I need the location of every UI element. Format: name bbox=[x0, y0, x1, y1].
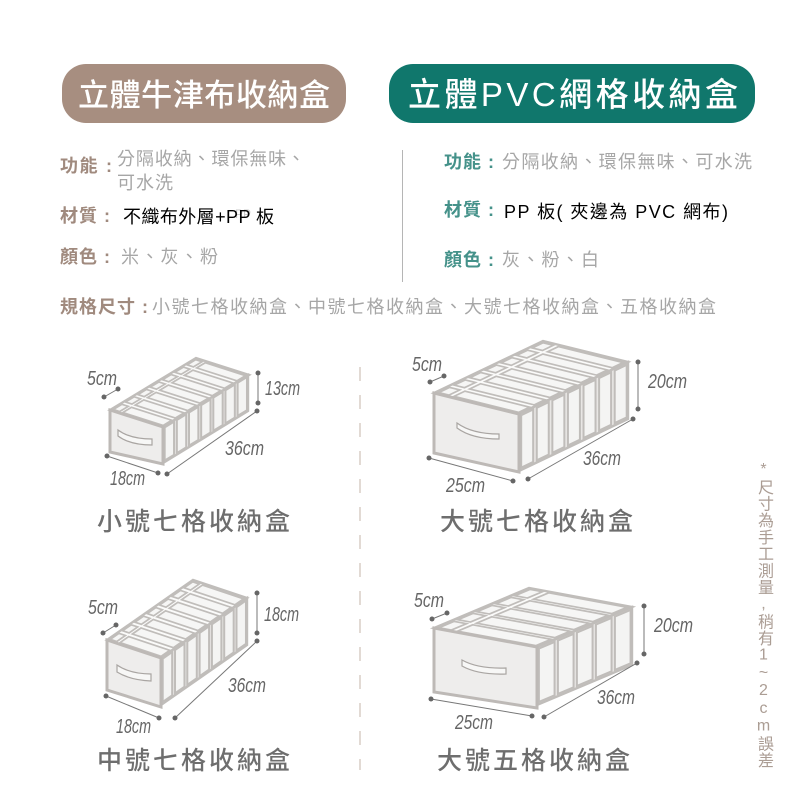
diagram: large 5-grid box bbox=[414, 588, 693, 775]
function row: 功能 : bbox=[60, 156, 112, 176]
dimension labels: 18cm bbox=[110, 468, 145, 490]
dimension labels: 25cm bbox=[445, 475, 485, 497]
dimension labels bbox=[414, 590, 693, 734]
diagram title: 中號七格收納盒 bbox=[97, 747, 290, 775]
box illustration bbox=[110, 358, 249, 464]
diagram: small 7-grid box bbox=[87, 358, 300, 536]
material row: PP bbox=[235, 207, 251, 221]
diagram: large 7-grid box bbox=[412, 341, 687, 536]
dimension labels: 5cm bbox=[412, 354, 442, 376]
dimension markers bbox=[426, 360, 640, 484]
material row bbox=[60, 206, 274, 227]
dimension labels: 36cm bbox=[225, 438, 264, 460]
colour row: 米、灰、粉 bbox=[121, 247, 218, 267]
box illustration bbox=[107, 580, 247, 707]
dimension labels: 36cm bbox=[228, 675, 266, 697]
dimension labels: 5cm bbox=[87, 368, 117, 390]
dimension labels: 20cm bbox=[653, 615, 693, 637]
dimension labels: 18cm bbox=[116, 716, 151, 738]
dashed divider between size diagrams bbox=[359, 367, 361, 770]
header pill: PVC mesh box: 立體PVC網格收納盒 bbox=[408, 76, 738, 113]
diagram title: 小號七格收納盒 bbox=[97, 508, 290, 536]
diagram: medium 7-grid box bbox=[88, 580, 299, 775]
size list: 規格尺寸 : bbox=[60, 297, 148, 317]
header pill: oxford fabric box bbox=[62, 64, 346, 123]
dimension labels: 36cm bbox=[597, 687, 635, 709]
material row: PP 板( 夾邊為 PVC 網布) bbox=[504, 202, 728, 222]
dimension markers bbox=[428, 604, 646, 720]
dimension labels: 18cm bbox=[264, 604, 299, 626]
dimension labels: 5cm bbox=[414, 590, 444, 612]
function row: 分隔收納、環保無味、 bbox=[117, 149, 305, 169]
dimension labels bbox=[87, 368, 300, 490]
size list: 小號七格收納盒、中號七格收納盒、大號七格收納盒、五格收納盒 bbox=[152, 297, 716, 317]
diagram title: 大號五格收納盒 bbox=[437, 747, 630, 775]
diagram title: 大號七格收納盒 bbox=[440, 508, 633, 536]
dimension labels bbox=[412, 354, 687, 497]
colour row: 顏色 : bbox=[444, 249, 494, 270]
function row: 功能 : bbox=[444, 152, 494, 172]
dimension markers bbox=[102, 370, 260, 476]
header pill: PVC mesh box bbox=[389, 64, 755, 123]
vertical side note: *尺寸為手工測量,稍有1~2cm誤差 bbox=[755, 461, 772, 769]
function row bbox=[60, 149, 305, 193]
material row: 不織布外層+PP 板 bbox=[123, 207, 274, 227]
box illustration bbox=[434, 341, 628, 472]
box illustration bbox=[434, 588, 632, 708]
dimension labels: 13cm bbox=[265, 378, 300, 400]
dimension labels: 20cm bbox=[647, 371, 687, 393]
material row: 材質 : bbox=[60, 206, 110, 226]
vertical divider between specifications bbox=[402, 150, 403, 282]
dimension labels: 5cm bbox=[88, 597, 118, 619]
panel: PVC mesh specifications bbox=[444, 152, 752, 270]
panel: oxford fabric specifications bbox=[60, 149, 305, 267]
colour row bbox=[444, 249, 599, 270]
dimension labels: 36cm bbox=[583, 448, 621, 470]
colour row bbox=[60, 246, 218, 267]
dimension labels: 25cm bbox=[454, 712, 493, 734]
function row: 可水洗 bbox=[117, 173, 173, 193]
dimension markers bbox=[100, 590, 260, 720]
dimension labels bbox=[88, 597, 299, 738]
header pill: oxford fabric box: 立體牛津布收納盒 bbox=[78, 78, 330, 113]
colour row: 顏色 : bbox=[60, 246, 110, 267]
material row: 材質 : bbox=[444, 200, 494, 220]
function row: 分隔收納、環保無味、可水洗 bbox=[502, 152, 752, 172]
colour row: 灰、粉、白 bbox=[502, 250, 599, 270]
